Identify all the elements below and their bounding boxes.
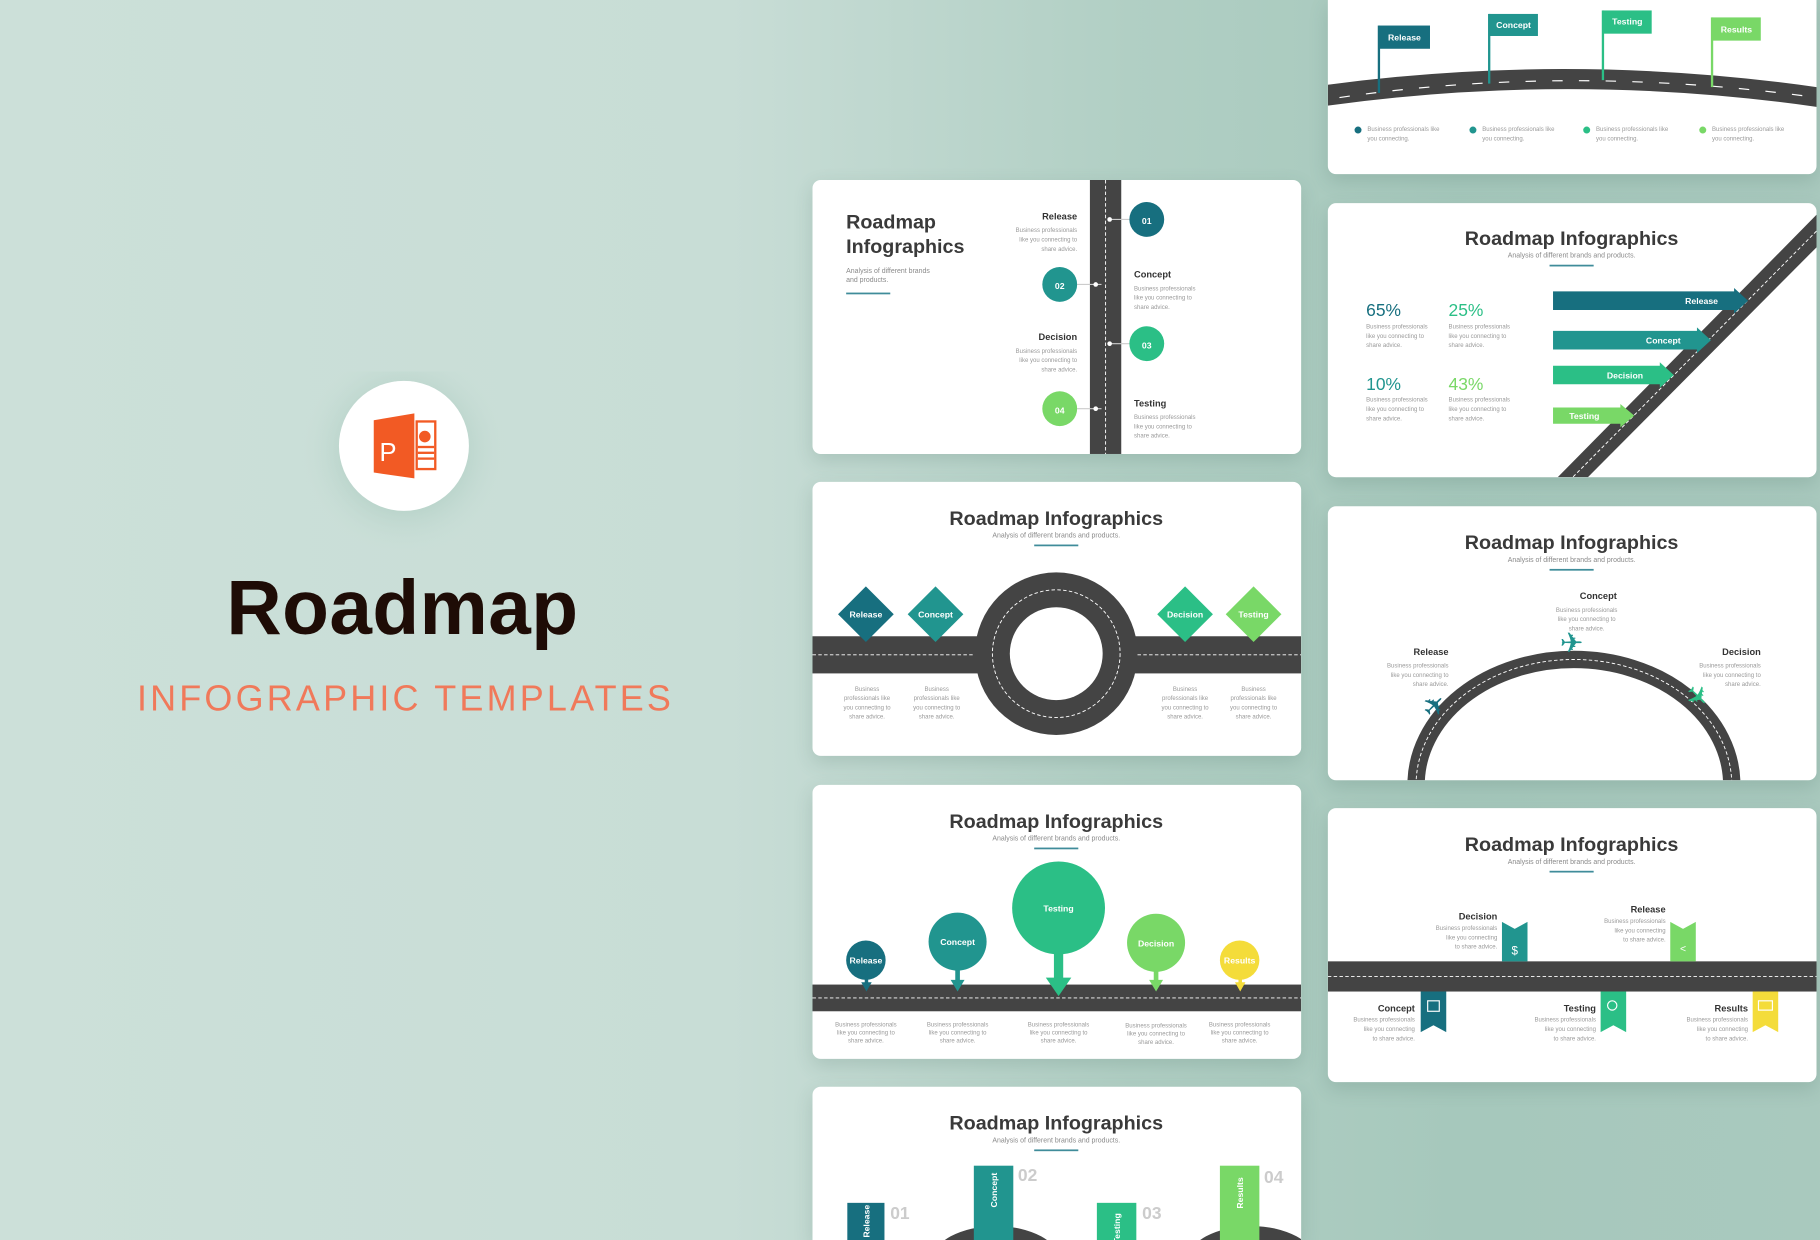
panel: ribbons road: Business professionals bbox=[1436, 926, 1497, 932]
panel: diagonal road: like you connecting to bbox=[1366, 407, 1425, 413]
panel: roundabout: you connecting to bbox=[1230, 705, 1278, 711]
panel: diagonal road: Decision bbox=[1607, 371, 1643, 381]
panel: vertical road: like you connecting to bbox=[1019, 358, 1078, 364]
panel: vertical bars (cut off): Release bbox=[861, 1205, 871, 1238]
icon: powerpoint: P bbox=[380, 439, 397, 467]
panel: diagonal road: like you connecting to bbox=[1449, 334, 1507, 340]
panel: pins: Business professionals bbox=[1125, 1024, 1187, 1030]
panel: arc road with planes: Roadmap Infographics bbox=[1465, 532, 1678, 554]
panel: arc road with planes: like you connecting to bbox=[1558, 617, 1616, 623]
panel: diagonal road: Business professionals bbox=[1449, 325, 1510, 331]
panel: ribbons road: to share advice. bbox=[1455, 945, 1498, 951]
panel: vertical road: Roadmap bbox=[846, 212, 936, 234]
panel: vertical road: and products. bbox=[846, 277, 888, 284]
panel: vertical bars (cut off) bbox=[812, 1087, 1301, 1240]
panel: arc road with planes: Release bbox=[1414, 647, 1449, 657]
panel: ribbons road: Concept bbox=[1378, 1003, 1415, 1013]
panel: roundabout: share advice. bbox=[1236, 715, 1272, 721]
panel: arc road with planes: like you connecting to bbox=[1391, 673, 1449, 679]
panel: roundabout: professionals like bbox=[844, 696, 891, 702]
panel: vertical road: like you connecting to bbox=[1134, 296, 1193, 302]
panel: pins: share advice. bbox=[1222, 1039, 1258, 1045]
panel: flags road: Business professionals like bbox=[1367, 127, 1440, 133]
panel: diagonal road: Business professionals bbox=[1366, 325, 1428, 331]
panel: roundabout: professionals like bbox=[1230, 696, 1277, 702]
panel: vertical road: Business professionals bbox=[1134, 415, 1196, 421]
panel: diagonal road: Roadmap Infographics bbox=[1465, 228, 1678, 250]
panel: ribbons road bbox=[1328, 808, 1817, 1082]
panel: pins: Decision bbox=[1138, 938, 1174, 948]
title: Roadmap bbox=[226, 566, 578, 651]
panel: vertical road: Analysis of different brands bbox=[846, 268, 930, 275]
panel: roundabout: share advice. bbox=[849, 715, 885, 721]
panel: arc road with planes: Business professionals bbox=[1387, 664, 1449, 670]
panel: ribbons road: like you connecting bbox=[1364, 1027, 1415, 1033]
panel: pins: Business professionals bbox=[1209, 1022, 1270, 1028]
panel: pins: Concept bbox=[940, 937, 975, 947]
panel: pins: share advice. bbox=[940, 1039, 976, 1045]
panel: pins: Business professionals bbox=[927, 1022, 988, 1028]
panel: vertical road: Decision bbox=[1039, 332, 1077, 342]
panel: arc road with planes: ✈ bbox=[1415, 687, 1454, 725]
panel: flags road: you connecting. bbox=[1367, 136, 1410, 142]
panel: ribbons road: to share advice. bbox=[1372, 1036, 1415, 1042]
panel: vertical road: share advice. bbox=[1041, 247, 1077, 253]
panel: roundabout: Business bbox=[1241, 687, 1266, 693]
panel: vertical bars (cut off): Roadmap Infographics bbox=[949, 1113, 1163, 1135]
panel: vertical road: Testing bbox=[1134, 398, 1167, 408]
panel: diagonal road: Business professionals bbox=[1366, 398, 1428, 404]
panel: roundabout bbox=[812, 482, 1301, 756]
panel: vertical road: Business professionals bbox=[1016, 228, 1077, 234]
panel: ribbons road: Results bbox=[1715, 1003, 1748, 1013]
panel: diagonal road: 65% bbox=[1366, 300, 1401, 320]
panel: roundabout: Decision bbox=[1167, 610, 1203, 620]
panel: diagonal road: Business professionals bbox=[1449, 398, 1510, 404]
panel: vertical road bbox=[812, 180, 1301, 454]
panel: vertical bars (cut off): 02 bbox=[1018, 1165, 1037, 1185]
panel: pins: like you connecting to bbox=[1127, 1032, 1186, 1038]
panel: vertical bars (cut off): 04 bbox=[1264, 1167, 1284, 1187]
panel: diagonal road: like you connecting to bbox=[1449, 407, 1507, 413]
panel: ribbons road: Business professionals bbox=[1353, 1018, 1415, 1024]
panel: ribbons road: to share advice. bbox=[1706, 1036, 1748, 1042]
panel: ribbons road: $ bbox=[1512, 944, 1518, 957]
panel: arc road with planes: like you connecting to bbox=[1703, 673, 1761, 679]
panel: vertical bars (cut off): 03 bbox=[1142, 1203, 1162, 1223]
panel: pins: share advice. bbox=[1138, 1040, 1174, 1046]
panel: ribbons road: to share advice. bbox=[1554, 1036, 1596, 1042]
panel: vertical road: share advice. bbox=[1041, 368, 1077, 374]
panel: ribbons road: Decision bbox=[1459, 912, 1498, 922]
panel: diagonal road: Concept bbox=[1646, 336, 1681, 346]
panel: ribbons road: Analysis of different brands and products. bbox=[1508, 859, 1636, 866]
panel: vertical road: Business professionals bbox=[1016, 349, 1077, 355]
panel: ribbons road: Roadmap Infographics bbox=[1465, 834, 1678, 856]
panel: ribbons road: < bbox=[1680, 944, 1686, 955]
panel: vertical road: Concept bbox=[1134, 269, 1171, 279]
panel: diagonal road: like you connecting to bbox=[1366, 334, 1425, 340]
panel: vertical bars (cut off): 01 bbox=[890, 1203, 910, 1223]
panel: pins: like you connecting to bbox=[1030, 1030, 1088, 1036]
panel: vertical bars (cut off): Concept bbox=[989, 1173, 999, 1207]
panel: diagonal road: share advice. bbox=[1449, 416, 1485, 422]
panel: pins: Release bbox=[849, 956, 882, 966]
panel: roundabout: share advice. bbox=[919, 715, 955, 721]
panel: ribbons road: Business professionals bbox=[1604, 919, 1666, 925]
panel: pins: like you connecting to bbox=[929, 1030, 987, 1036]
panel: roundabout: Business bbox=[924, 687, 949, 693]
panel: flags road: Business professionals like bbox=[1596, 127, 1669, 133]
panel: vertical bars (cut off): Analysis of different brands and products. bbox=[992, 1137, 1120, 1144]
panel: roundabout: Roadmap Infographics bbox=[949, 508, 1163, 530]
panel: arc road with planes: Decision bbox=[1722, 647, 1761, 657]
panel: roundabout: Testing bbox=[1238, 610, 1269, 620]
panel: ribbons road: Business professionals bbox=[1687, 1018, 1748, 1024]
panel: vertical bars (cut off): Results bbox=[1235, 1177, 1245, 1209]
panel: roundabout: Business bbox=[855, 687, 879, 693]
panel: diagonal road: 25% bbox=[1449, 300, 1483, 320]
panel: flags road bbox=[1328, 0, 1817, 174]
panel: arc road with planes: ✈ bbox=[1678, 677, 1716, 716]
panel: flags road: Testing bbox=[1612, 16, 1642, 26]
panel: roundabout: you connecting to bbox=[1162, 705, 1209, 711]
panel: arc road with planes: share advice. bbox=[1569, 626, 1605, 632]
subtitle: INFOGRAPHIC TEMPLATES bbox=[137, 678, 671, 719]
panel: flags road: Business professionals like bbox=[1482, 127, 1555, 133]
panel: ribbons road: Business professionals bbox=[1534, 1018, 1596, 1024]
panel: ribbons road: like you connecting bbox=[1614, 928, 1666, 934]
panel: ribbons road: Release bbox=[1631, 905, 1666, 915]
panel: pins: Results bbox=[1224, 956, 1255, 966]
panel: pins: Testing bbox=[1043, 903, 1074, 913]
panel: diagonal road: Analysis of different brands and products. bbox=[1508, 253, 1636, 260]
panel: roundabout: share advice. bbox=[1167, 715, 1203, 721]
panel: vertical road: Business professionals bbox=[1134, 286, 1196, 292]
panel: arc road with planes: Concept bbox=[1580, 591, 1617, 601]
panel: pins: Business professionals bbox=[1028, 1022, 1089, 1028]
panel: pins: share advice. bbox=[848, 1039, 884, 1045]
panel: vertical road: 03 bbox=[1142, 340, 1152, 350]
panel: pins: Roadmap Infographics bbox=[949, 811, 1163, 833]
panel: ribbons road: Testing bbox=[1564, 1003, 1596, 1013]
panel: flags road: you connecting. bbox=[1596, 136, 1638, 142]
panel: flags road: Results bbox=[1721, 25, 1752, 35]
panel: ribbons road: like you connecting bbox=[1697, 1027, 1748, 1033]
panel: pins: like you connecting to bbox=[1211, 1030, 1269, 1036]
panel: arc road with planes: Analysis of different brands and products. bbox=[1508, 557, 1636, 564]
left branding block bbox=[137, 380, 671, 719]
panel: roundabout: professionals like bbox=[1162, 696, 1209, 702]
panel: pins: Business professionals bbox=[835, 1022, 897, 1028]
panel: vertical road: Infographics bbox=[846, 236, 964, 258]
panel: ribbons road: like you connecting bbox=[1545, 1027, 1596, 1033]
panel: arc road with planes bbox=[1328, 506, 1817, 780]
panel: diagonal road: 10% bbox=[1366, 374, 1401, 394]
panel: diagonal road: share advice. bbox=[1366, 343, 1402, 349]
panel: pins bbox=[812, 785, 1301, 1059]
panel: diagonal road: share advice. bbox=[1366, 416, 1402, 422]
panel: roundabout: you connecting to bbox=[843, 705, 891, 711]
panel: arc road with planes: share advice. bbox=[1725, 682, 1761, 688]
panel: pins: like you connecting to bbox=[837, 1030, 895, 1036]
panel: flags road: Business professionals like bbox=[1712, 127, 1785, 133]
panel: vertical road: share advice. bbox=[1134, 434, 1170, 440]
panel: arc road with planes: share advice. bbox=[1413, 682, 1449, 688]
panel: vertical road: like you connecting to bbox=[1134, 424, 1193, 430]
icon: powerpoint bbox=[299, 346, 508, 555]
panel: arc road with planes: Business professionals bbox=[1556, 608, 1617, 614]
panel: vertical road: 01 bbox=[1142, 216, 1152, 226]
panel: diagonal road: share advice. bbox=[1449, 343, 1485, 349]
panel: roundabout: you connecting to bbox=[913, 705, 961, 711]
panel: roundabout: Analysis of different brands and products. bbox=[992, 533, 1120, 540]
panel: arc road with planes: ✈ bbox=[1560, 628, 1583, 659]
panel: diagonal road: Testing bbox=[1569, 411, 1599, 421]
panel: pins: share advice. bbox=[1041, 1039, 1077, 1045]
panel: vertical road: Release bbox=[1042, 211, 1077, 221]
panel: diagonal road: Release bbox=[1685, 296, 1718, 306]
panel: vertical road: share advice. bbox=[1134, 305, 1170, 311]
panel: vertical road: 02 bbox=[1055, 281, 1065, 291]
panel: flags road: you connecting. bbox=[1482, 136, 1525, 142]
panel: flags road: you connecting. bbox=[1712, 136, 1755, 142]
panel: arc road with planes: Business professionals bbox=[1699, 664, 1761, 670]
panel: vertical road: like you connecting to bbox=[1019, 237, 1078, 243]
panel: roundabout: Business bbox=[1173, 687, 1197, 693]
panel: roundabout: Concept bbox=[918, 610, 953, 620]
panel: flags road: Concept bbox=[1496, 20, 1531, 30]
panel: vertical road: 04 bbox=[1055, 405, 1065, 415]
panel: ribbons road: to share advice. bbox=[1623, 938, 1666, 944]
panel: ribbons road: like you connecting bbox=[1446, 935, 1497, 941]
panel: roundabout: professionals like bbox=[914, 696, 960, 702]
panel: pins: Analysis of different brands and products. bbox=[992, 836, 1120, 843]
panel: flags road: Release bbox=[1388, 33, 1421, 43]
panel: roundabout: Release bbox=[849, 610, 882, 620]
panel: diagonal road: 43% bbox=[1449, 374, 1483, 394]
panel: diagonal road bbox=[1328, 203, 1817, 477]
